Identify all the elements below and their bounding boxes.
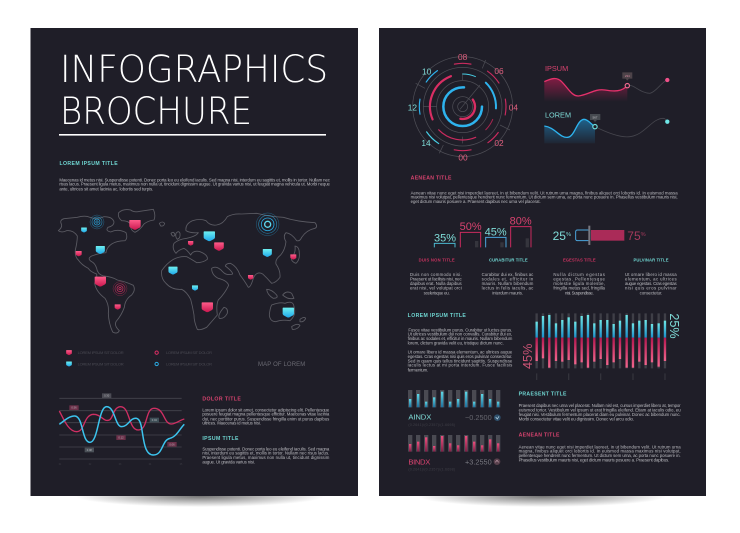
radial labels: 00 xyxy=(458,153,468,163)
dolor paragraph: Lorem ipsum dolor sit amet, consectetur adipiscing elit. Pellentesque xyxy=(202,407,330,412)
column: egestas: molestie ligula molestie, xyxy=(553,281,605,286)
map legend: LOREM IPSUM SIT DOLOR xyxy=(78,350,124,355)
dolor paragraph xyxy=(202,407,330,426)
blue upper bars xyxy=(535,315,666,338)
chart axis labels: 02 xyxy=(89,464,92,466)
values xyxy=(409,392,499,407)
radial labels: 12 xyxy=(408,103,417,113)
line chart: lorem xyxy=(544,110,669,143)
values xyxy=(409,436,499,452)
grid lines xyxy=(59,398,182,459)
aenean paragraph xyxy=(519,444,681,463)
label 45%: 45% xyxy=(521,344,535,369)
title: BROCHURE xyxy=(60,90,252,133)
column: duis non: dapibus erat. Nulla dapibus xyxy=(410,281,462,286)
map legend xyxy=(66,350,212,366)
ipsum paragraph: Suspendisse potenti. Donec porta leo eu eleifend iaculis. Sed magna xyxy=(202,446,330,451)
line chart: left page xyxy=(59,393,184,466)
column: curabitur: Curabitur dui ex, finibus ac xyxy=(482,272,534,277)
paragraphs: Fusce vitae vestibulum purus. Curabitur ut luctus purus. xyxy=(408,327,512,332)
aenean paragraph xyxy=(411,190,678,204)
column: duis non: erat nisi, vel volutpat orci xyxy=(410,286,462,291)
paragraphs: fermentum. xyxy=(408,367,428,372)
column: egestas xyxy=(553,258,606,295)
grey rings and spokes xyxy=(413,57,513,157)
mini bars: bindx: (0.2641)/(0.2357)/(1.6698) xyxy=(408,467,455,471)
line chart: ipsum: IPSUM xyxy=(545,64,568,73)
chart axis labels: 03 xyxy=(119,464,122,466)
aenean paragraph: eget dictum mauris posuere a. Praesent dapibus nec urna vel placerat. xyxy=(411,199,541,204)
blue map pins xyxy=(81,227,294,317)
aenean paragraph: magna, finibus aliquet orci lobortis id. In euismod massa maximus nisi volutpat, xyxy=(519,449,681,454)
ipsum paragraph: nisi, interdum eu sagittis et, mollis in tortor. Nullam nec risus lacus. xyxy=(202,451,329,456)
radial arcs xyxy=(401,45,524,168)
line chart: ipsum: 234 xyxy=(625,74,630,78)
radial labels: 14 xyxy=(421,138,431,148)
mini bars: aindx: −0.2500 xyxy=(465,413,492,422)
map legend: LOREM IPSUM SIT DOLOR xyxy=(166,350,212,355)
bar 50%: 50% xyxy=(460,221,482,233)
radial labels xyxy=(408,52,518,163)
column: duis non xyxy=(410,258,462,295)
heading: ipsum title: IPSUM TITLE xyxy=(202,436,239,442)
aenean paragraph: pellentesque hendrerit nunc fermentum. Ut dictum sem urna, ac porta nunc posuere in. xyxy=(519,453,681,458)
column: egestas: Nulla dictum egestas xyxy=(553,272,605,277)
section: aenean intro xyxy=(411,176,678,204)
title: INFOGRAPHICS xyxy=(60,48,328,91)
text block: intro xyxy=(59,177,331,191)
column: egestas: EGESTAS TITLE xyxy=(563,258,596,263)
dolor paragraph: ultrices. Maecenas id metus nisi. xyxy=(202,421,261,426)
column: curabitur: mauris. Nullam bibendum xyxy=(482,281,534,286)
map legend: LOREM IPSUM SIT DOLOR xyxy=(166,361,212,366)
ring marker: brazil xyxy=(113,282,127,296)
column: duis non: DUIS NON TITLE xyxy=(419,258,455,263)
radial labels: 02 xyxy=(494,138,504,148)
paragraphs: Sed in quam quis tellus tincidunt sagittis. Suspendisse xyxy=(408,358,513,363)
chart value labels: 0.12 xyxy=(118,436,124,440)
chart value labels: 0.08 xyxy=(87,448,92,452)
bar chart: diverging xyxy=(521,313,681,380)
aenean paragraph: Aenean vitae nunc eget nisi imperdiet laoreet, in ut bibendum velit. Ut rutrum urna xyxy=(519,444,681,449)
split bar 25/75: 75 xyxy=(627,229,641,243)
column: curabitur: interdum mauris. xyxy=(492,290,523,295)
section: lorem ipsum text xyxy=(408,313,513,372)
chart value labels xyxy=(69,393,177,452)
heading: aenean title: AENEAN TITLE xyxy=(519,432,560,438)
mini bars: bindx: BINDX xyxy=(408,457,430,466)
column: curabitur: lectus in felis iaculis, ac xyxy=(482,286,534,291)
ring marker: russia xyxy=(256,213,279,236)
line chart: ipsum xyxy=(544,64,669,102)
heading: praesent title: PRAESENT TITLE xyxy=(519,391,567,397)
column: pulvinar xyxy=(625,258,677,295)
radial labels: 06 xyxy=(494,66,504,76)
text block: intro: Maecenas id metus nisi. Suspendisse potenti. Donec porta leo eu eleifend iaculis. Sed magna nisi, interdum eu sagittis et, mollis in tortor. Nullam nec xyxy=(59,177,331,182)
chart axis labels: 05 xyxy=(180,464,183,466)
praesent paragraph: Morbi consectetur vitae velit eu dignissim. Donec vel arcu odio. xyxy=(519,416,634,421)
column: egestas: egestas. Pellentesque xyxy=(553,276,606,281)
bar tracks xyxy=(537,313,665,368)
line chart: lorem: LOREM xyxy=(545,110,571,119)
title xyxy=(60,48,328,133)
praesent paragraph: euismod tortor. Vestibulum vel ipsum ut erat fringilla eleifend. Etiam at iaculis odio, eu xyxy=(519,407,681,412)
paragraphs: lorem, dictum gravida velit eu, tristique dictum nunc. xyxy=(408,341,504,346)
section: praesent and aenean xyxy=(519,391,681,463)
title underline xyxy=(59,134,326,136)
percentage bars xyxy=(434,215,532,247)
bar 80%: 80% xyxy=(510,215,532,227)
radial labels: 08 xyxy=(458,52,468,62)
text block: dolor and ipsum xyxy=(202,397,330,464)
panel: left brochure page xyxy=(30,28,358,496)
radial labels: 10 xyxy=(422,66,432,76)
paragraphs: egestas. Cras egestas nisi quis eros pulvinar consectetur. xyxy=(408,354,512,359)
column: pulvinar: nisi quis eros pulvinar xyxy=(625,286,677,291)
paragraphs xyxy=(408,327,513,372)
column: pulvinar: consectetur. xyxy=(640,290,662,295)
column: pulvinar: PULVINAR TITLE xyxy=(633,258,669,263)
column: egestas: fringilla metus sed, fringilla xyxy=(553,286,606,291)
split bar 25/75: % xyxy=(641,232,646,238)
ring marker: north america xyxy=(90,215,104,229)
column: egestas: nisi. Suspendisse. xyxy=(565,290,594,295)
column: curabitur: CURABITUR TITLE xyxy=(489,258,528,263)
paragraphs: iaculis lectus at mi porta interdum. Fusce facilisis xyxy=(408,363,512,368)
ipsum paragraph: augue. Ut gravida varius nisi. xyxy=(202,459,255,464)
split bar 25/75: % xyxy=(566,232,571,238)
map caption: MAP OF LOREM xyxy=(258,362,305,368)
bar 35%: 35% xyxy=(434,233,456,245)
chart axis labels: 04 xyxy=(149,464,152,466)
split bar 25/75: 25 xyxy=(553,229,566,243)
column: pulvinar: elementum, ac ultrices xyxy=(625,276,677,281)
column: pulvinar: Ut ornare libero id massa xyxy=(625,272,677,277)
line chart: lorem: 567 xyxy=(592,115,598,119)
ipsum paragraph xyxy=(202,446,330,464)
mini bars: bindx xyxy=(408,435,500,471)
chart axis labels: 01 xyxy=(59,464,62,466)
world map xyxy=(58,209,317,368)
column: pulvinar: augue egestas. Cras egestas xyxy=(625,281,677,286)
mini bars: aindx: AINDX xyxy=(408,413,431,422)
dolor paragraph: posuere feugiat magna pellentesque efficitur. Maecenas vitae lacinia xyxy=(202,412,330,417)
label 25%: 25% xyxy=(667,313,681,339)
praesent paragraph xyxy=(519,403,681,421)
page shadow: left xyxy=(75,485,325,507)
mini bars: aindx xyxy=(408,390,501,427)
mini bars: bindx: +3.2550 xyxy=(465,457,492,466)
aenean paragraph: maximus nisi volutpat, pellentesque hendrerit nunc fermentum. Ut dictum sem urna, ac porta nunc posuere in. Phasellus vestibulum mauris nisi, xyxy=(411,195,678,200)
text block: intro: risus lacus. Praesent ligula metus, maximus non nulla ut, tincidunt dignissim augue. Ut gravida varius nisi, ut feugiat magna vehicula ut. Morbi neque xyxy=(59,182,331,187)
tracks xyxy=(410,390,498,407)
map outlines xyxy=(58,209,317,333)
four column titles and text xyxy=(410,258,677,295)
heading: dolor title: DOLOR TITLE xyxy=(202,397,241,403)
praesent paragraph: Praesent dapibus nec urna vel placerat. Nullam nisl est, cursus imperdiet libero at, tempor xyxy=(519,403,681,408)
bar 45%: 45% xyxy=(485,226,507,238)
chart axis labels xyxy=(59,464,183,466)
pink curve xyxy=(59,407,184,432)
map legend: LOREM IPSUM SIT DOLOR xyxy=(78,361,124,366)
pink map pins xyxy=(76,220,296,312)
page shadow: right xyxy=(417,485,667,507)
split bar 25/75 xyxy=(553,226,646,245)
column: curabitur xyxy=(482,258,534,295)
tracks xyxy=(410,435,498,452)
column: curabitur: sodales et, efficitur in xyxy=(482,276,534,281)
chart value labels: 0.04 xyxy=(152,418,157,422)
column: duis non: scelerisque eu. xyxy=(424,290,450,295)
paragraphs: finibus ac sodales et, efficitur in mauris. Nullam bibendum xyxy=(408,336,513,341)
axis ticks xyxy=(537,373,665,380)
paragraphs: Ut ornare libero id massa elementum, ac ultrices augue xyxy=(408,350,513,355)
dolor paragraph: dui, nec porttitor purus. Suspendisse fringilla enim ut purus dapibus xyxy=(202,416,329,421)
mini bars: aindx: (0.2641)/(0.2357)/(1.6698) xyxy=(408,423,455,427)
pink lower bars xyxy=(535,338,666,368)
chart value labels: 0.56 xyxy=(71,406,77,410)
panel: right brochure page xyxy=(379,28,706,496)
aenean paragraph: Phasellus vestibulum mauris nisi, eget dictum mauris posuere a. Praesent dapibus. xyxy=(519,458,669,463)
heading: lorem ipsum title: LOREM IPSUM TITLE xyxy=(60,161,118,167)
chart value labels: 0.06 xyxy=(169,442,175,446)
ipsum paragraph: Praesent ligula metus, maximus non nulla ut, tincidunt dignissim xyxy=(202,455,330,460)
text block: intro: ante, ultrices sit amet lacinia ac, lobortis sed turpis. xyxy=(59,186,153,191)
heading: aenean title: AENEAN TITLE xyxy=(411,176,452,182)
chart value labels: 0.30 xyxy=(104,394,110,398)
paragraphs: Ut ultrices vestibulum dui non convallis. Curabitur dui ex, xyxy=(408,332,512,337)
blue curve xyxy=(59,407,184,455)
radial chart xyxy=(401,45,524,168)
radial labels: 04 xyxy=(509,102,518,112)
aenean paragraph: Aenean vitae nunc eget nisi imperdiet laoreet, in ut bibendum velit. Ut rutrum urna magna, finibus aliquet orci lobortis id. In euismod massa xyxy=(411,190,678,195)
praesent paragraph: feugiat nisi. Vestibulum fermentum placerat diam eu pulvinar. Donec ac bibendum nunc. xyxy=(519,412,681,417)
column: duis non: Praesent ut facilisis nisi, nec xyxy=(410,276,462,281)
heading: lorem ipsum title: LOREM IPSUM TITLE xyxy=(408,313,466,319)
column: duis non: Duis non commodo nisi. xyxy=(410,272,462,277)
